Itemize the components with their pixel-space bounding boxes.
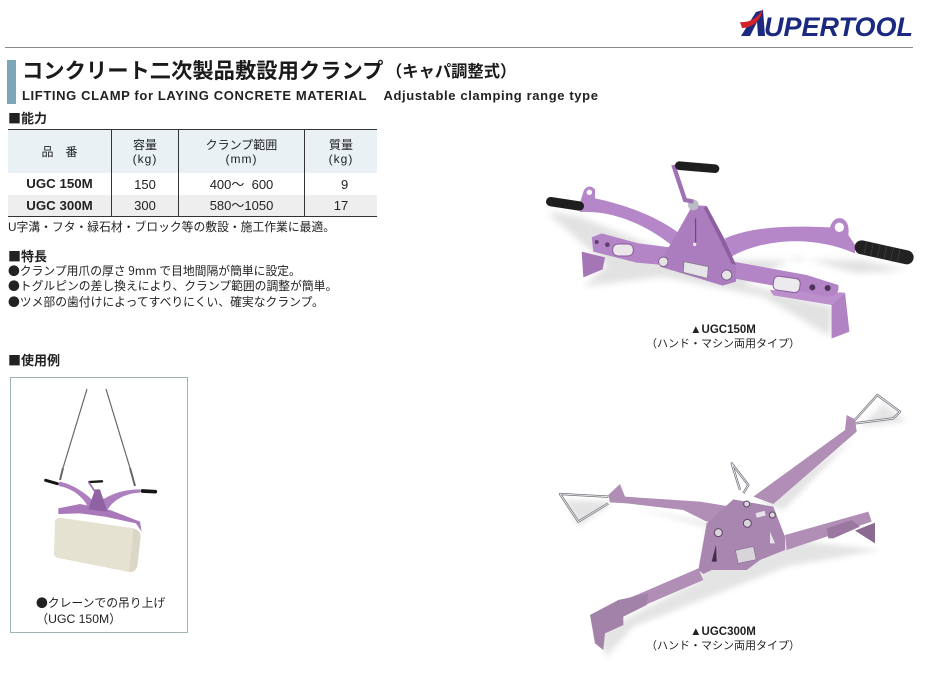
row: 150 capacity: 150	[134, 177, 156, 192]
right arm	[753, 415, 857, 504]
header: weight: 質量	[329, 138, 353, 152]
left handle	[551, 202, 579, 206]
right beam with claw	[785, 512, 875, 550]
title suffix: （キャパ調整式）	[386, 63, 516, 81]
wire handles	[560, 395, 900, 522]
photo caption model: （UGC 150M）	[36, 612, 121, 626]
row: 300 capacity: 300	[134, 198, 156, 213]
right lever with eye	[725, 218, 855, 257]
type note: （ハンド・マシン両用タイプ）	[646, 640, 800, 652]
header: clamp range: クランプ範囲	[206, 138, 277, 152]
header rule	[5, 47, 913, 48]
right ribbed handle	[862, 242, 907, 262]
header: capacity: 容量	[133, 138, 157, 152]
header: weight	[329, 138, 353, 166]
photo caption: ●クレーンでの吊り上げ	[36, 594, 165, 611]
column divider 2	[178, 129, 179, 217]
product photo: UGC300M clamp	[558, 394, 904, 655]
crank arm	[673, 165, 693, 202]
column divider 3	[304, 129, 305, 217]
row: 300 range: 580～1050	[210, 198, 273, 213]
clamp handles	[46, 480, 155, 492]
right beam and foot	[733, 262, 849, 338]
heading: usage example: ■使用例	[8, 350, 60, 369]
header: clamp range: (mm)	[226, 152, 257, 166]
left beam	[592, 233, 670, 265]
row: 300 weight: 17	[334, 198, 348, 213]
row 2 background	[8, 195, 377, 216]
model name: ▲UGC150M	[690, 324, 756, 336]
usage note: U字溝・フタ・緑石材・ブロック等の敷設・施工作業に最適。	[8, 220, 335, 234]
left beam with claw	[590, 568, 703, 650]
row: 150 weight: 9	[341, 177, 348, 192]
clamp levers and plate	[59, 482, 140, 512]
UGC300M caption	[646, 626, 800, 652]
title: コンクリート二次製品敷設用クランプ	[22, 59, 383, 83]
spec table	[8, 129, 377, 217]
header: capacity: (kg)	[133, 152, 157, 166]
type note: （ハンド・マシン両用タイプ）	[646, 338, 800, 350]
header: clamp range	[206, 138, 277, 166]
feature 2: ●トグルピンの差し換えにより、クランプ範囲の調整が簡単。	[8, 277, 337, 294]
panel: usage example photo	[10, 377, 188, 633]
bottom rule	[8, 216, 377, 217]
model name: ▲UGC300M	[690, 626, 756, 638]
top handle	[679, 166, 715, 169]
title accent bar	[7, 60, 16, 104]
logo: SUPERTOOL	[740, 9, 913, 41]
wire handle highlights	[560, 395, 900, 522]
central plate	[698, 499, 785, 574]
soft shadow	[550, 212, 907, 337]
row: 150 range: 400～ 600	[210, 177, 273, 192]
header: capacity	[133, 138, 157, 166]
left lever with eye	[580, 186, 678, 247]
product photo: UGC150M clamp	[546, 161, 914, 338]
left foot	[582, 252, 605, 277]
UGC150M caption	[646, 324, 800, 350]
column divider 1	[111, 129, 112, 217]
photo: block lifted by clamp	[44, 388, 158, 572]
row: UGC 300M model: UGC 300M	[26, 198, 93, 213]
header: part number: 品 番	[41, 145, 78, 159]
top rule	[8, 129, 377, 130]
feature 3: ●ツメ部の歯付けによってすべりにくい、確実なクランプ。	[8, 293, 324, 310]
lifting wires	[60, 389, 135, 486]
soft shadow	[565, 403, 907, 657]
heading: features: ■特長	[8, 246, 47, 265]
row: UGC 150M model: UGC 150M	[26, 176, 93, 191]
table header background	[8, 130, 377, 173]
icon: logo swoosh	[740, 9, 765, 36]
heading: capacity: ■能力	[8, 108, 47, 127]
central plate	[659, 200, 736, 286]
clamp beam on block	[58, 504, 142, 532]
left arm	[608, 484, 731, 522]
subtitle: LIFTING CLAMP for LAYING CONCRETE MATERIAL Adjustable clamping range type	[22, 88, 599, 103]
feature list	[8, 262, 337, 310]
header: weight: (kg)	[329, 152, 353, 166]
concrete block	[54, 518, 141, 572]
feature 1: ●クランプ用爪の厚さ 9mm で目地間隔が簡単に設定。	[8, 262, 301, 279]
